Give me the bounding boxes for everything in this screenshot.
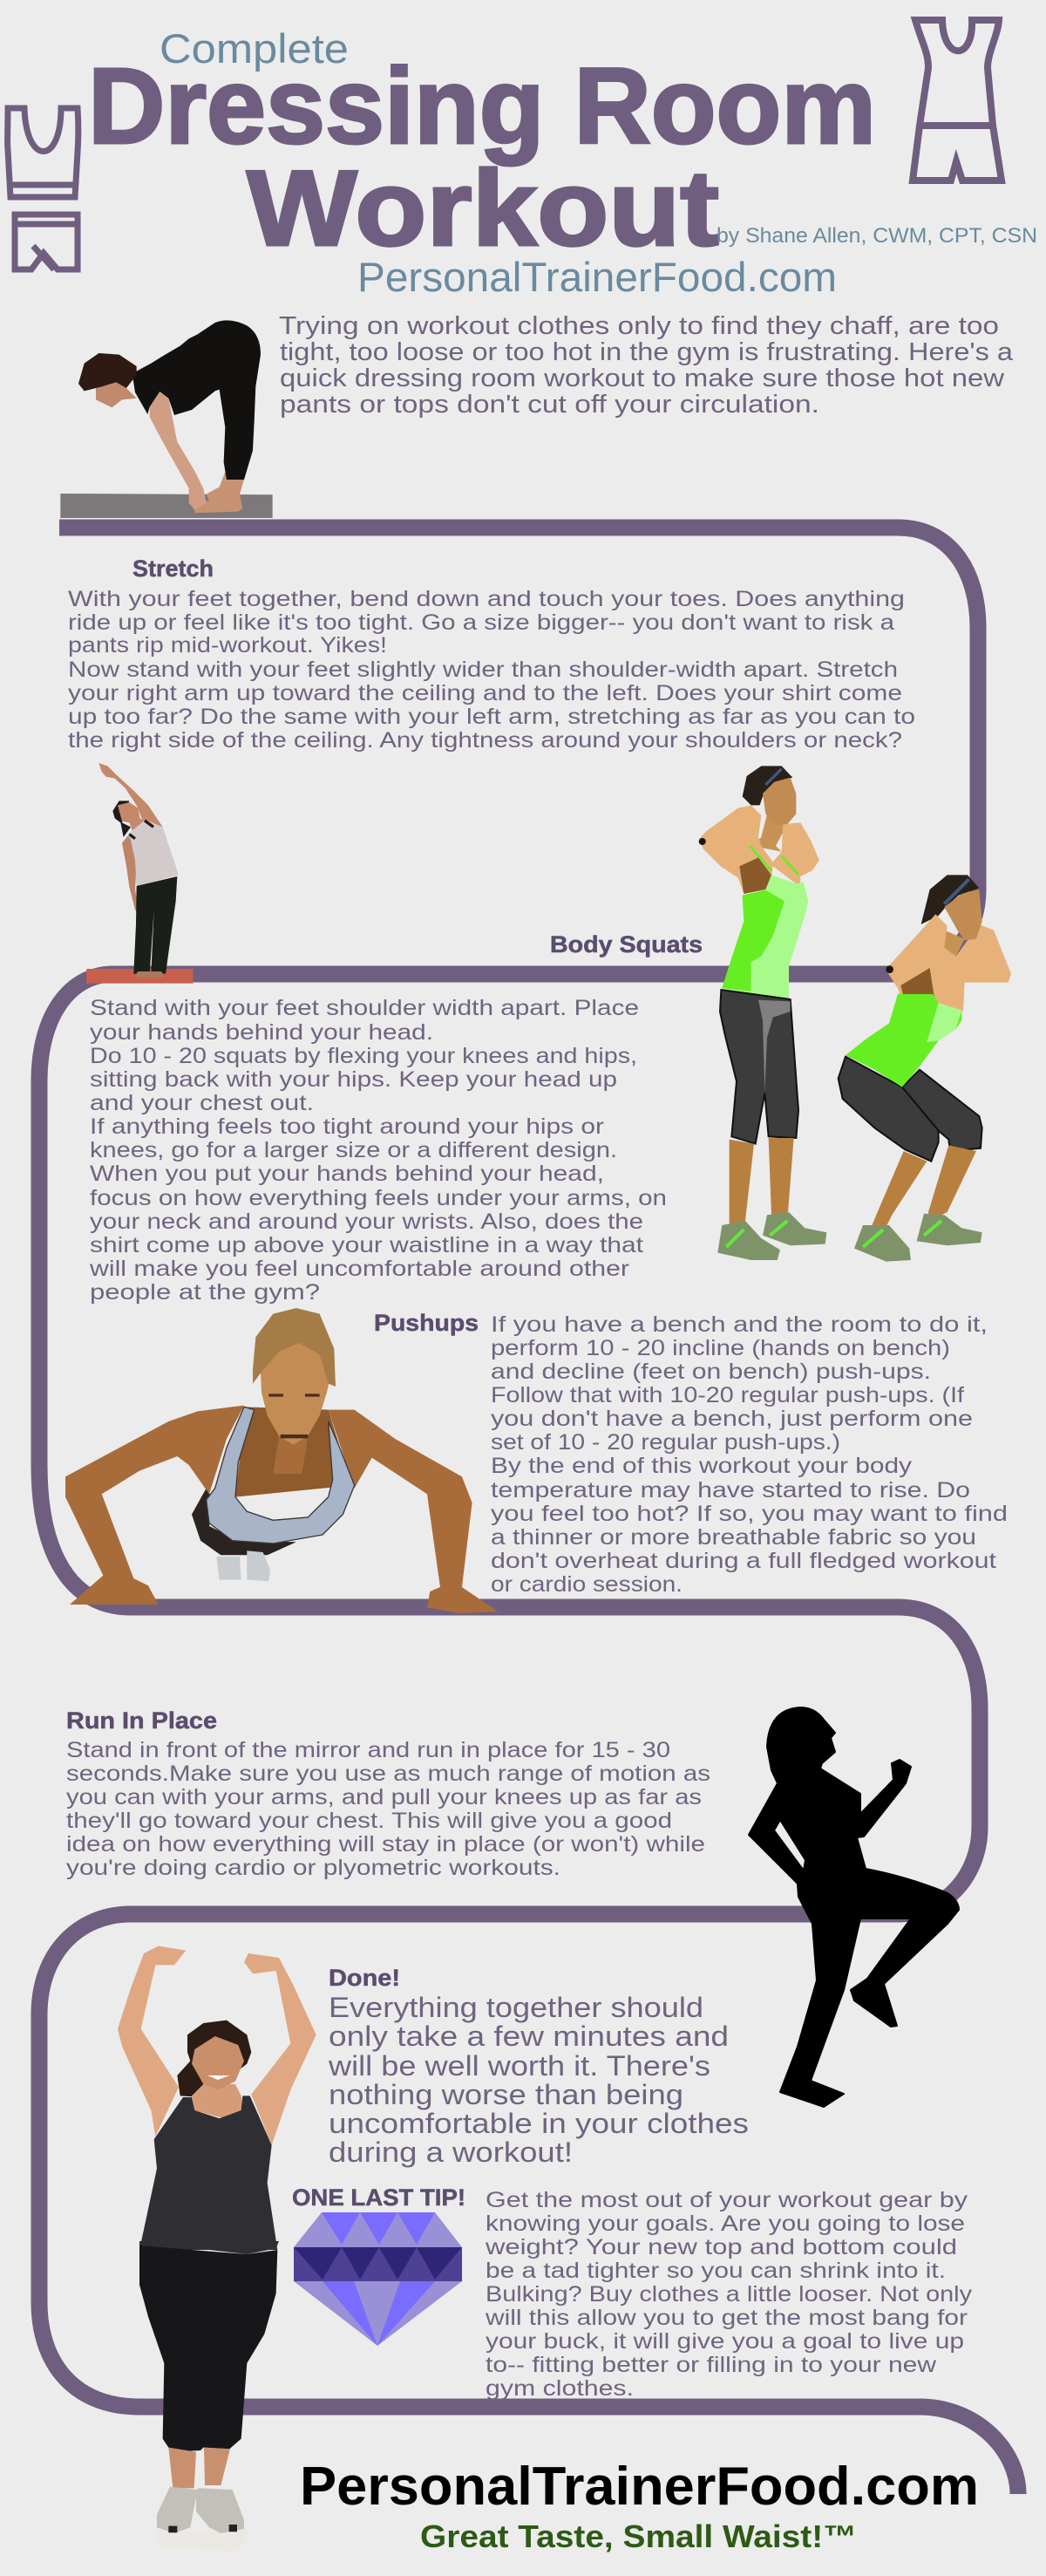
figure: woman touching toes: [60, 320, 273, 518]
tip body text: be a tad tighter so you can shrink into it.: [486, 2259, 946, 2283]
title block: [88, 25, 1037, 300]
done body text: nothing worse than being: [329, 2079, 683, 2110]
squats body text: and your chest out.: [90, 1091, 314, 1115]
section heading: Pushups: Pushups: [374, 1310, 479, 1336]
arms and chest: [699, 805, 819, 894]
feet: [137, 971, 163, 978]
arms and chest: [886, 914, 1011, 1012]
hair: [177, 2021, 251, 2097]
smile: [207, 2075, 229, 2080]
headband: [944, 879, 969, 904]
lower body: [717, 990, 826, 1260]
intro text: Trying on workout clothes only to find they chaff, are too: [279, 312, 999, 340]
figure: running silhouette: [749, 1707, 959, 2107]
tip body text: knowing your goals. Are you going to lose: [486, 2211, 965, 2236]
red mat: [86, 969, 194, 984]
calves: [168, 2448, 230, 2488]
tank strap marks: [129, 821, 153, 839]
squats body text: When you put your hands behind your head,: [90, 1162, 604, 1186]
face: [192, 2036, 244, 2090]
footer tagline: Great Taste, Small Waist!™: [420, 2518, 857, 2554]
leggings: [720, 990, 798, 1144]
black tank: [139, 2096, 277, 2250]
pushups body text: set of 10 - 20 regular push-ups.): [491, 1430, 840, 1455]
neck: [930, 930, 965, 957]
squats body text: knees, go for a larger size or a different design.: [90, 1138, 617, 1162]
back leg: [902, 1070, 982, 1151]
done body text: will be well worth it. There's: [328, 2050, 710, 2082]
pushups body text: don't overheat during a full fledged workout: [491, 1549, 996, 1573]
done body text: uncomfortable in your clothes: [329, 2108, 749, 2139]
stretch body text: up too far? Do the same with your left arm, stretching as far as you can to: [68, 705, 915, 729]
curly hair: [78, 353, 137, 391]
title: Workout: Workout: [247, 149, 719, 269]
raised arms: [118, 1946, 316, 2145]
tip body text: to-- fitting better or filling in to your new: [486, 2353, 937, 2377]
intro text: pants or tops don't cut off your circulation.: [280, 391, 819, 419]
arm: [150, 392, 207, 510]
run in place body text: Stand in front of the mirror and run in place for 15 - 30: [66, 1738, 670, 1762]
elbow shadow: [699, 838, 706, 845]
pushups body text: If you have a bench and the room to do it,: [491, 1312, 988, 1337]
hair: [253, 1308, 336, 1387]
neck: [752, 814, 787, 852]
tip body text: [485, 2188, 973, 2401]
face: [260, 1337, 333, 1445]
left arm: [65, 1406, 244, 1605]
section heading: Body Squats: Body Squats: [550, 931, 703, 957]
icon: shorts: [15, 215, 78, 269]
tank hem: [139, 2241, 279, 2254]
tip body text: Bulking? Buy clothes a little looser. Not only: [486, 2282, 973, 2307]
squats body text: [89, 996, 667, 1305]
squats body text: people at the gym?: [90, 1280, 320, 1305]
right arm: [329, 1410, 499, 1613]
squats body text: Do 10 - 20 squats by flexing your knees and hips,: [90, 1044, 637, 1068]
stretch body text: Now stand with your feet slightly wider than shoulder-width apart. Stretch: [68, 658, 898, 682]
pushups body text: temperature may have started to rise. Do: [491, 1478, 970, 1503]
run in place body text: idea on how everything will stay in place (or won't) while: [66, 1832, 705, 1857]
gray tank: [207, 1407, 355, 1544]
face: [96, 382, 137, 407]
squats body text: Stand with your feet shoulder width apart. Place: [90, 996, 639, 1020]
foot and calf: [194, 468, 244, 513]
shoe stripes: [726, 1221, 787, 1247]
icon: top and shorts outfit: [913, 20, 1002, 181]
front leg: [839, 1057, 939, 1162]
upper body: [118, 1946, 316, 2250]
shadow: [900, 968, 935, 1005]
section heading: Run In Place: Run In Place: [66, 1707, 217, 1734]
intro text: quick dressing room workout to make sure those hot new: [280, 365, 1005, 392]
black pants: [133, 876, 177, 974]
run in place body text: you can with your arms, and pull your knees up as far as: [66, 1785, 702, 1809]
white tank: [128, 820, 179, 886]
figure: woman doing pushup: [65, 1308, 499, 1613]
title: Complete: Complete: [160, 25, 349, 72]
upper body: [886, 875, 1011, 1012]
pushups body text: you don't have a bench, just perform one: [491, 1407, 973, 1431]
shoes: [157, 2487, 244, 2533]
green tank: [722, 875, 808, 1000]
figure: woman arms raised: [118, 1946, 316, 2551]
raised arm: [98, 763, 163, 828]
winding path band: [39, 528, 1018, 2494]
stretch body text: your right arm up toward the ceiling and to the left. Does your shirt come: [68, 681, 902, 705]
stretch body text: [68, 587, 915, 753]
pushups body text: and decline (feet on bench) push-ups.: [491, 1360, 931, 1384]
tip body text: Get the most out of your workout gear by: [486, 2188, 968, 2212]
run in place body text: [66, 1738, 710, 1880]
hair: [112, 801, 131, 837]
leggings light panel: [758, 1000, 791, 1093]
calves: [870, 1145, 976, 1230]
green tank: [846, 994, 961, 1087]
black outfit: [132, 320, 261, 480]
squats body text: your hands behind your head.: [90, 1020, 433, 1045]
footer website: PersonalTrainerFood.com: [300, 2457, 979, 2517]
tip body text: weight? Your new top and bottom could: [485, 2235, 957, 2259]
shoe toes: [168, 2525, 237, 2532]
squats body text: sitting back with your hips. Keep your head up: [90, 1067, 617, 1092]
squats body text: your neck and around your wrists. Also, does the: [90, 1210, 643, 1234]
calves: [730, 1138, 794, 1227]
elbow shadow: [886, 965, 893, 973]
pushups body text: a thinner or more breathable fabric so you: [491, 1525, 976, 1550]
intro text: tight, too loose or too hot in the gym is frustrating. Here's a: [280, 338, 1014, 366]
tank highlight: [927, 1003, 961, 1042]
icon: diamond: [294, 2212, 462, 2346]
tip body text: will this allow you to get the most bang for: [485, 2306, 968, 2330]
run in place body text: you're doing cardio or plyometric workouts.: [66, 1856, 560, 1880]
stretch body text: the right side of the ceiling. Any tightness around your shoulders or neck?: [68, 728, 902, 753]
pushups body text: or cardio session.: [491, 1572, 683, 1597]
chest: [235, 1407, 351, 1497]
run in place body text: they'll go toward your chest. This will give you a good: [66, 1809, 672, 1833]
byline: by Shane Allen, CWM, CPT, CSN: [717, 224, 1037, 248]
shoes: [216, 1550, 270, 1581]
pushups body text: you feel too hot? If so, you may want to find: [491, 1502, 1008, 1526]
upper body: [699, 766, 819, 1000]
tip body text: your buck, it will give you a goal to live up: [486, 2329, 964, 2354]
floor mat: [60, 494, 273, 518]
eyes and mouth: [268, 1394, 320, 1438]
scale: [155, 2529, 247, 2551]
neck: [273, 1436, 308, 1474]
title: Dressing Room: Dressing Room: [88, 47, 876, 167]
squats body text: If anything feels too tight around your hips or: [90, 1114, 604, 1139]
face and neck: [118, 802, 148, 835]
shoes: [717, 1212, 826, 1260]
lowered arm: [122, 835, 139, 916]
intro text: [279, 312, 1014, 419]
website heading: PersonalTrainerFood.com: [357, 254, 837, 300]
leggings: [139, 2245, 277, 2452]
figure: woman side stretching: [86, 763, 194, 984]
section heading: Stretch: Stretch: [132, 555, 214, 582]
figure: woman standing, hands behind head: [699, 766, 826, 1260]
heading: one last tip: ONE LAST TIP!: [292, 2184, 465, 2211]
shoe stripes: [863, 1221, 941, 1247]
bun and hair: [743, 766, 792, 835]
tip body text: gym clothes.: [486, 2376, 634, 2401]
done body text: during a workout!: [329, 2136, 573, 2168]
shoes: [854, 1214, 982, 1262]
stretch body text: With your feet together, bend down and touch your toes. Does anything: [68, 587, 905, 611]
neck and chest: [192, 2084, 244, 2117]
pushups body text: By the end of this workout your body: [491, 1454, 913, 1478]
icon: tank top: [8, 108, 78, 197]
squats body text: focus on how everything feels under your arms, on: [90, 1186, 667, 1210]
squats body text: shirt come up above your waistline in a way that: [90, 1233, 643, 1257]
lower body: [139, 2241, 279, 2551]
done body text: Everything together should: [329, 1992, 703, 2023]
tank straps: [750, 846, 798, 875]
pushups body text: perform 10 - 20 incline (hands on bench): [491, 1336, 950, 1360]
run in place body text: seconds.Make sure you use as much range of motion as: [66, 1762, 710, 1786]
headband: [765, 769, 782, 785]
pushups body text: [491, 1312, 1008, 1597]
hair: [921, 875, 979, 924]
figure: woman squatting: [839, 875, 1011, 1262]
dark shorts: [192, 1489, 296, 1555]
done body text: only take a few minutes and: [329, 2021, 729, 2052]
face: [944, 889, 982, 940]
squats body text: will make you feel uncomfortable around other: [89, 1257, 629, 1281]
stretch body text: pants rip mid-workout. Yikes!: [68, 633, 387, 658]
done body text: [328, 1992, 749, 2168]
stretch body text: ride up or feel like it's too tight. Go a size bigger-- you don't want to risk a: [68, 610, 894, 635]
underarm shadow: [739, 857, 771, 894]
pushups body text: Follow that with 10-20 regular push-ups. (If: [491, 1383, 964, 1407]
face: [763, 778, 796, 826]
section heading: Done: Done!: [329, 1965, 400, 1991]
lower body: [839, 994, 982, 1262]
tank shadow: [722, 890, 784, 992]
